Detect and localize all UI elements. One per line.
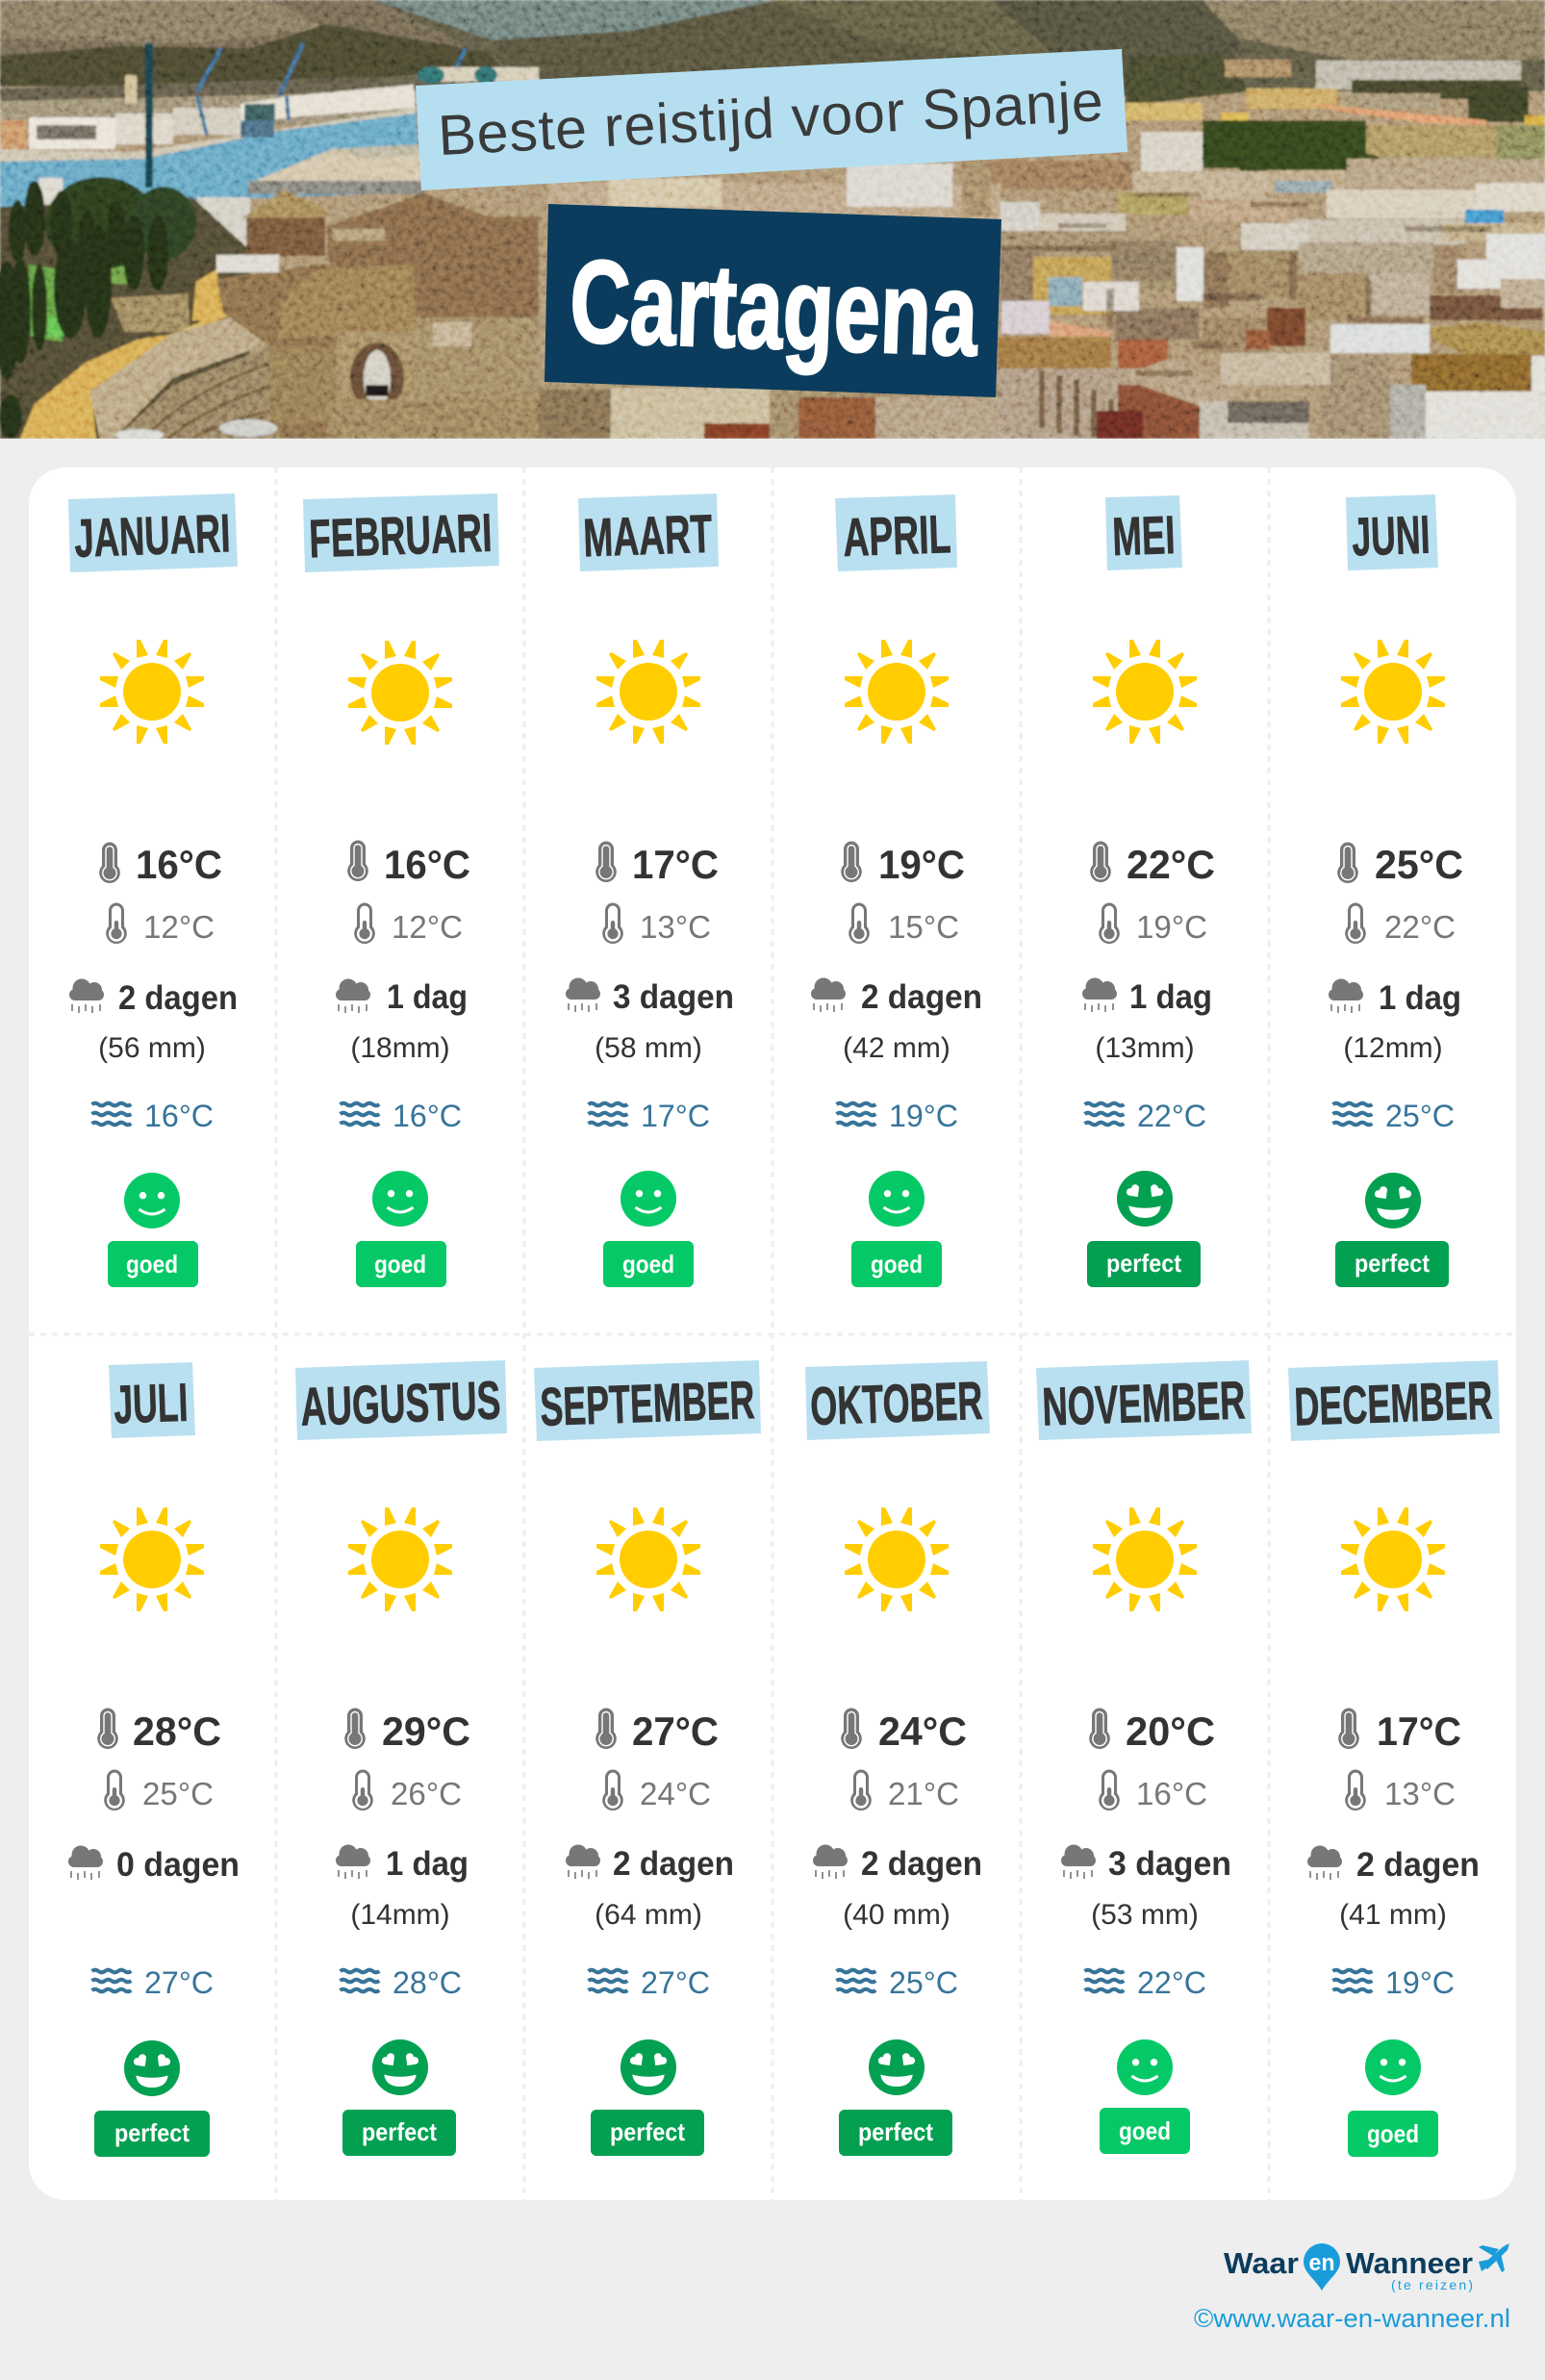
rain days: 2 dagen — [1356, 1846, 1480, 1884]
icon: sun — [596, 1507, 700, 1611]
low temperature: 21°C — [888, 1776, 959, 1811]
icon: sun — [348, 641, 452, 745]
sea temperature: 16°C — [393, 1099, 462, 1133]
rating badge: perfect — [362, 2117, 437, 2146]
low temperature: 16°C — [1136, 1776, 1207, 1811]
panel: augustus — [295, 1360, 507, 2156]
high temperature — [1338, 1709, 1461, 1754]
month label: augustus — [295, 1360, 507, 1440]
low temperature — [850, 1770, 959, 1811]
sea temperature: 22°C — [1137, 1099, 1206, 1133]
icon: perfect smiley — [124, 2040, 180, 2096]
month label: april: APRIL — [842, 503, 951, 568]
panel: mei — [1082, 495, 1215, 1287]
rain days: 1 dag — [1129, 978, 1212, 1016]
month label: oktober: OKTOBER — [809, 1370, 983, 1436]
panel: juni — [1329, 494, 1463, 1287]
rain days — [1061, 1845, 1231, 1883]
rainfall: (12mm) — [1343, 1032, 1443, 1064]
december climate data — [1307, 1507, 1480, 2157]
high temperature — [841, 1709, 967, 1754]
sea temperature: 22°C — [1137, 1965, 1206, 2000]
rain days — [1307, 1845, 1480, 1884]
rating badge — [591, 2110, 704, 2156]
icon: sun — [1341, 640, 1445, 744]
sea temperature — [589, 1965, 710, 2000]
sea temperature: 28°C — [393, 1965, 462, 2000]
low temperature — [354, 902, 463, 945]
high temperature: 24°C — [878, 1709, 967, 1754]
low temperature — [1099, 1770, 1207, 1811]
panel: februari — [303, 494, 499, 1287]
copyright url: ©www.waar-en-wanneer.nl — [1194, 2304, 1510, 2333]
rating badge — [94, 2111, 210, 2157]
logo: Waar en Wanneer: Waar — [1224, 2246, 1299, 2280]
sea temperature: 27°C — [641, 1965, 710, 2000]
panel: oktober — [805, 1361, 990, 2156]
rain days — [69, 979, 238, 1017]
low temperature: 12°C — [392, 909, 463, 945]
low temperature: 26°C — [391, 1776, 462, 1811]
panel: monthly climate table — [29, 468, 1516, 2200]
month label: januari: JANUARI — [73, 502, 231, 569]
low temperature — [104, 1770, 214, 1811]
icon: sun — [1341, 1507, 1445, 1611]
high temperature: 17°C — [1377, 1709, 1461, 1754]
logo: Waar en Wanneer — [1224, 2243, 1509, 2292]
month label: maart: MAART — [582, 503, 713, 568]
subtitle banner: Beste reistijd voor Spanje — [416, 49, 1127, 190]
juni climate data — [1329, 640, 1463, 1287]
low temperature: 13°C — [640, 909, 711, 945]
high temperature — [1090, 841, 1215, 887]
high temperature: 25°C — [1375, 842, 1463, 887]
februari climate data — [336, 641, 470, 1287]
month label: februari: FEBRUARI — [308, 502, 493, 569]
high temperature: 16°C — [384, 842, 470, 887]
rating badge — [356, 1241, 446, 1287]
icon: plane — [1479, 2243, 1509, 2272]
icon: good smiley — [1365, 2039, 1421, 2095]
title banner: Cartagena: Cartagena — [568, 236, 981, 380]
subtitle banner: Beste reistijd voor Spanje: Beste reistijd voor Spanje — [437, 69, 1104, 167]
high temperature: 29°C — [382, 1709, 470, 1754]
rating badge: perfect — [610, 2117, 685, 2146]
low temperature — [848, 902, 959, 945]
low temperature — [1099, 902, 1207, 945]
rating badge — [603, 1241, 694, 1287]
sea temperature: 25°C — [1385, 1099, 1455, 1133]
panel: september — [534, 1360, 761, 2156]
month label: juni — [1346, 494, 1438, 570]
logo: Waar en Wanneer: (te reizen) — [1391, 2277, 1473, 2292]
rating badge: perfect — [1106, 1249, 1181, 1278]
low temperature: 25°C — [142, 1776, 214, 1811]
high temperature — [97, 1709, 221, 1754]
rain days: 3 dagen — [1108, 1845, 1231, 1883]
rain days — [566, 977, 734, 1016]
month label: april — [835, 494, 957, 571]
mei climate data — [1082, 640, 1215, 1287]
rainfall: (18mm) — [350, 1032, 450, 1064]
panel: november — [1036, 1360, 1252, 2154]
low temperature — [106, 902, 215, 945]
rain days — [68, 1845, 240, 1884]
rating badge: perfect — [1355, 1249, 1430, 1278]
rain days: 1 dag — [386, 1845, 469, 1883]
icon: good smiley — [621, 1171, 676, 1227]
icon: sun — [845, 1507, 949, 1611]
icon: good smiley — [869, 1171, 924, 1227]
month label: februari — [303, 494, 499, 572]
augustus climate data — [336, 1507, 470, 2156]
low temperature — [352, 1770, 462, 1811]
high temperature — [595, 841, 719, 887]
icon: sun — [348, 1507, 452, 1611]
rain days — [1082, 977, 1212, 1016]
high temperature — [841, 841, 965, 887]
rating badge — [839, 2110, 952, 2156]
high temperature: 20°C — [1126, 1709, 1215, 1754]
month label: mei: MEI — [1111, 504, 1176, 567]
april climate data — [811, 640, 982, 1287]
month label: mei — [1105, 495, 1182, 570]
low temperature: 13°C — [1384, 1776, 1456, 1811]
icon: sun — [1093, 640, 1197, 744]
rating badge — [342, 2110, 456, 2156]
rain days: 0 dagen — [116, 1846, 240, 1884]
low temperature: 22°C — [1384, 909, 1456, 945]
sea temperature — [589, 1099, 710, 1133]
november climate data — [1061, 1507, 1231, 2154]
high temperature — [1337, 842, 1463, 887]
icon: sun — [845, 640, 949, 744]
rain days — [813, 1845, 982, 1883]
maart climate data — [566, 640, 734, 1287]
rating badge: goed — [1367, 2119, 1419, 2148]
oktober climate data — [813, 1507, 982, 2156]
rating badge: goed — [871, 1250, 923, 1279]
month label: september — [534, 1360, 761, 1441]
rating badge: goed — [374, 1250, 426, 1279]
sea temperature: 25°C — [889, 1965, 958, 2000]
rain days: 3 dagen — [613, 978, 734, 1016]
month label: maart — [578, 494, 719, 571]
high temperature — [99, 842, 222, 887]
rating badge — [1335, 1241, 1449, 1287]
rain days: 1 dag — [1379, 979, 1461, 1017]
rating badge: perfect — [858, 2117, 933, 2146]
month label: oktober — [805, 1361, 990, 1440]
month label: juli — [109, 1362, 195, 1438]
sea temperature — [1085, 1099, 1206, 1133]
sea temperature — [92, 1965, 214, 2000]
month label: juni: JUNI — [1351, 504, 1431, 567]
rain days: 2 dagen — [613, 1845, 734, 1883]
sea temperature: 17°C — [641, 1099, 710, 1133]
panel: maart — [566, 494, 734, 1287]
rain days: 2 dagen — [861, 978, 982, 1016]
logo: Waar en Wanneer: Wanneer — [1346, 2246, 1473, 2280]
rainfall: (40 mm) — [843, 1899, 950, 1931]
low temperature — [1345, 1770, 1456, 1811]
rain days: 1 dag — [387, 978, 468, 1016]
icon: map pin — [1304, 2243, 1340, 2291]
rating badge — [1348, 2111, 1438, 2157]
logo: Waar en Wanneer: en — [1308, 2250, 1335, 2276]
januari climate data — [69, 640, 238, 1287]
rainfall: (58 mm) — [595, 1032, 702, 1064]
low temperature: 15°C — [888, 909, 959, 945]
rating badge — [108, 1241, 198, 1287]
sea temperature — [837, 1965, 958, 2000]
panel: december — [1288, 1360, 1500, 2157]
high temperature: 22°C — [1127, 842, 1215, 887]
high temperature — [595, 1709, 719, 1754]
sea temperature — [837, 1099, 958, 1133]
high temperature: 16°C — [136, 842, 222, 887]
rain days — [336, 978, 468, 1016]
high temperature: 17°C — [632, 842, 719, 887]
icon: perfect smiley — [1117, 1171, 1173, 1227]
low temperature: 24°C — [640, 1776, 711, 1811]
september climate data — [566, 1507, 734, 2156]
rating badge: goed — [1119, 2116, 1171, 2145]
sea temperature — [1333, 1965, 1455, 2000]
panel: januari — [68, 494, 238, 1287]
rain days — [566, 1845, 734, 1883]
rating badge — [1100, 2108, 1190, 2154]
low temperature — [602, 902, 711, 945]
rating badge: goed — [622, 1250, 674, 1279]
sea temperature — [341, 1099, 462, 1133]
month label: januari — [68, 494, 238, 572]
sea temperature — [341, 1965, 462, 2000]
icon: perfect smiley — [1365, 1173, 1421, 1228]
sea temperature — [1085, 1965, 1206, 2000]
icon: perfect smiley — [869, 2039, 924, 2095]
rating badge: goed — [126, 1250, 178, 1279]
low temperature — [602, 1770, 711, 1811]
high temperature — [344, 1709, 470, 1754]
rainfall: (56 mm) — [98, 1032, 206, 1064]
title banner: Cartagena — [545, 204, 1001, 397]
icon: sun — [596, 640, 700, 744]
month label: november — [1036, 1360, 1252, 1440]
rainfall: (53 mm) — [1091, 1899, 1199, 1931]
month label: augustus: AUGUSTUS — [299, 1369, 501, 1437]
icon: perfect smiley — [621, 2039, 676, 2095]
panel: april — [811, 494, 982, 1287]
low temperature: 12°C — [143, 909, 215, 945]
rain days — [1329, 979, 1461, 1017]
low temperature — [1345, 902, 1456, 945]
rain days: 2 dagen — [118, 979, 238, 1017]
sea temperature — [92, 1099, 214, 1133]
rainfall: (14mm) — [350, 1899, 450, 1931]
rating badge — [851, 1241, 942, 1287]
high temperature: 28°C — [133, 1709, 221, 1754]
icon: sun — [1093, 1507, 1197, 1611]
header photo: Cartagena harbour and city — [0, 0, 1545, 441]
rainfall: (41 mm) — [1339, 1899, 1447, 1931]
high temperature — [347, 841, 470, 887]
rating badge: perfect — [114, 2118, 190, 2147]
icon: perfect smiley — [372, 2039, 428, 2095]
low temperature: 19°C — [1136, 909, 1207, 945]
icon: sun — [100, 640, 204, 744]
sea temperature — [1333, 1099, 1455, 1133]
rainfall: (13mm) — [1095, 1032, 1195, 1064]
month label: november: NOVEMBER — [1041, 1369, 1246, 1437]
sea temperature: 16°C — [144, 1099, 214, 1133]
rain days — [811, 977, 982, 1016]
sea temperature: 27°C — [144, 1965, 214, 2000]
month label: september: SEPTEMBER — [539, 1369, 755, 1437]
shadow strips in the city — [1000, 192, 1491, 376]
juli climate data — [68, 1507, 240, 2157]
rating badge — [1087, 1241, 1201, 1287]
rain days: 2 dagen — [861, 1845, 982, 1883]
panel: juli — [68, 1362, 240, 2157]
high temperature: 19°C — [878, 842, 965, 887]
sea temperature: 19°C — [889, 1099, 958, 1133]
high temperature: 27°C — [632, 1709, 719, 1754]
rainfall: (64 mm) — [595, 1899, 702, 1931]
icon: sun — [100, 1507, 204, 1611]
rain days — [336, 1845, 469, 1883]
icon: good smiley — [1117, 2039, 1173, 2095]
high temperature — [1089, 1709, 1215, 1754]
icon: good smiley — [372, 1171, 428, 1227]
sea temperature: 19°C — [1385, 1965, 1455, 2000]
rainfall: (42 mm) — [843, 1032, 950, 1064]
icon: good smiley — [124, 1173, 180, 1228]
month label: juli: JULI — [113, 1372, 189, 1434]
